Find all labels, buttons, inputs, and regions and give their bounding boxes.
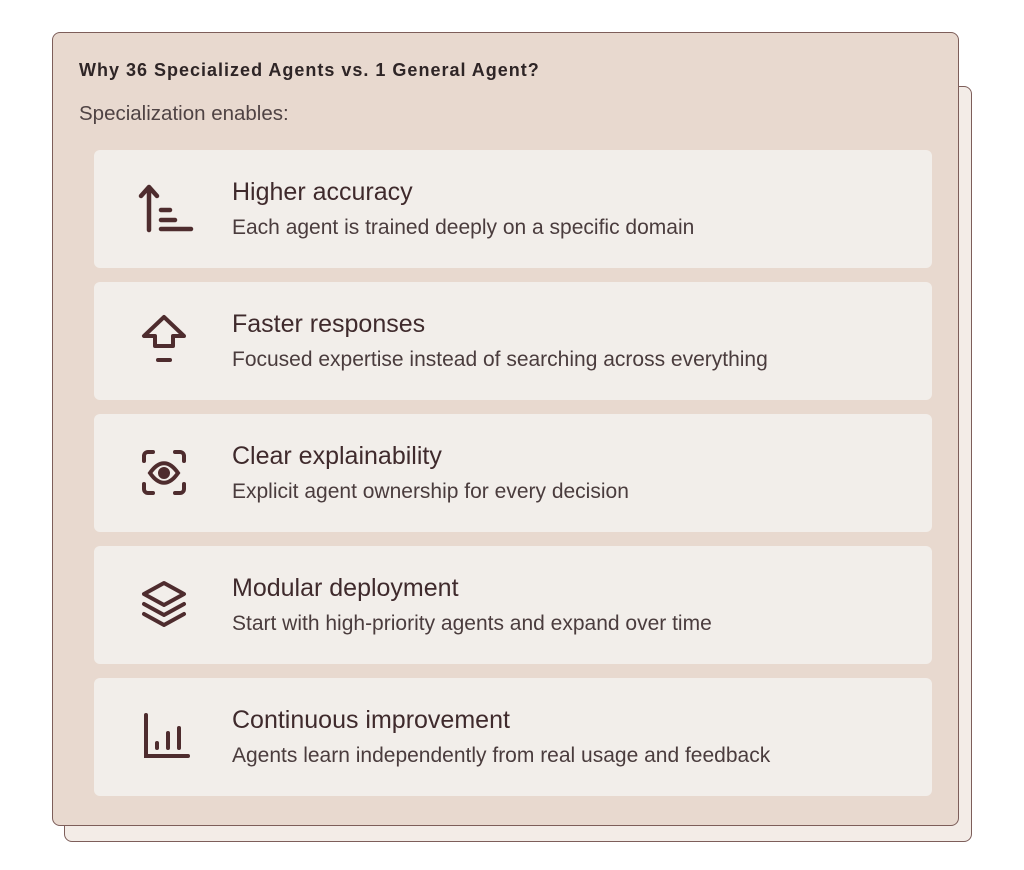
- card: modular deployment: Start with high-priority agents and expand over time: [232, 612, 712, 635]
- card: continuous improvement: Continuous improvement: [232, 706, 510, 734]
- card: continuous improvement: [94, 678, 932, 796]
- subtitle: Specialization enables:: [79, 102, 289, 125]
- card: modular deployment: Modular deployment: [232, 574, 459, 602]
- card: clear explainability: Explicit agent ownership for every decision: [232, 480, 629, 503]
- card: higher accuracy: Each agent is trained deeply on a specific domain: [232, 216, 694, 239]
- card: modular deployment: [94, 546, 932, 664]
- card: higher accuracy: Higher accuracy: [232, 178, 413, 206]
- back shadow panel: [64, 86, 972, 842]
- icon: upload arrow: [142, 314, 186, 362]
- icon: eye focus: [142, 450, 186, 495]
- icon: arrow up list: [138, 184, 194, 232]
- icon: bar chart: [144, 713, 190, 758]
- card: clear explainability: Clear explainability: [232, 442, 442, 470]
- card: faster responses: Focused expertise instead of searching across everything: [232, 348, 768, 371]
- card: higher accuracy: [94, 150, 932, 268]
- card: continuous improvement: Agents learn independently from real usage and feedback: [232, 744, 770, 767]
- icon: layers: [142, 581, 186, 627]
- card: faster responses: [94, 282, 932, 400]
- title: Why 36 Specialized Agents vs. 1 General Agent?: [79, 60, 540, 80]
- card: clear explainability: [94, 414, 932, 532]
- card: faster responses: Faster responses: [232, 310, 425, 338]
